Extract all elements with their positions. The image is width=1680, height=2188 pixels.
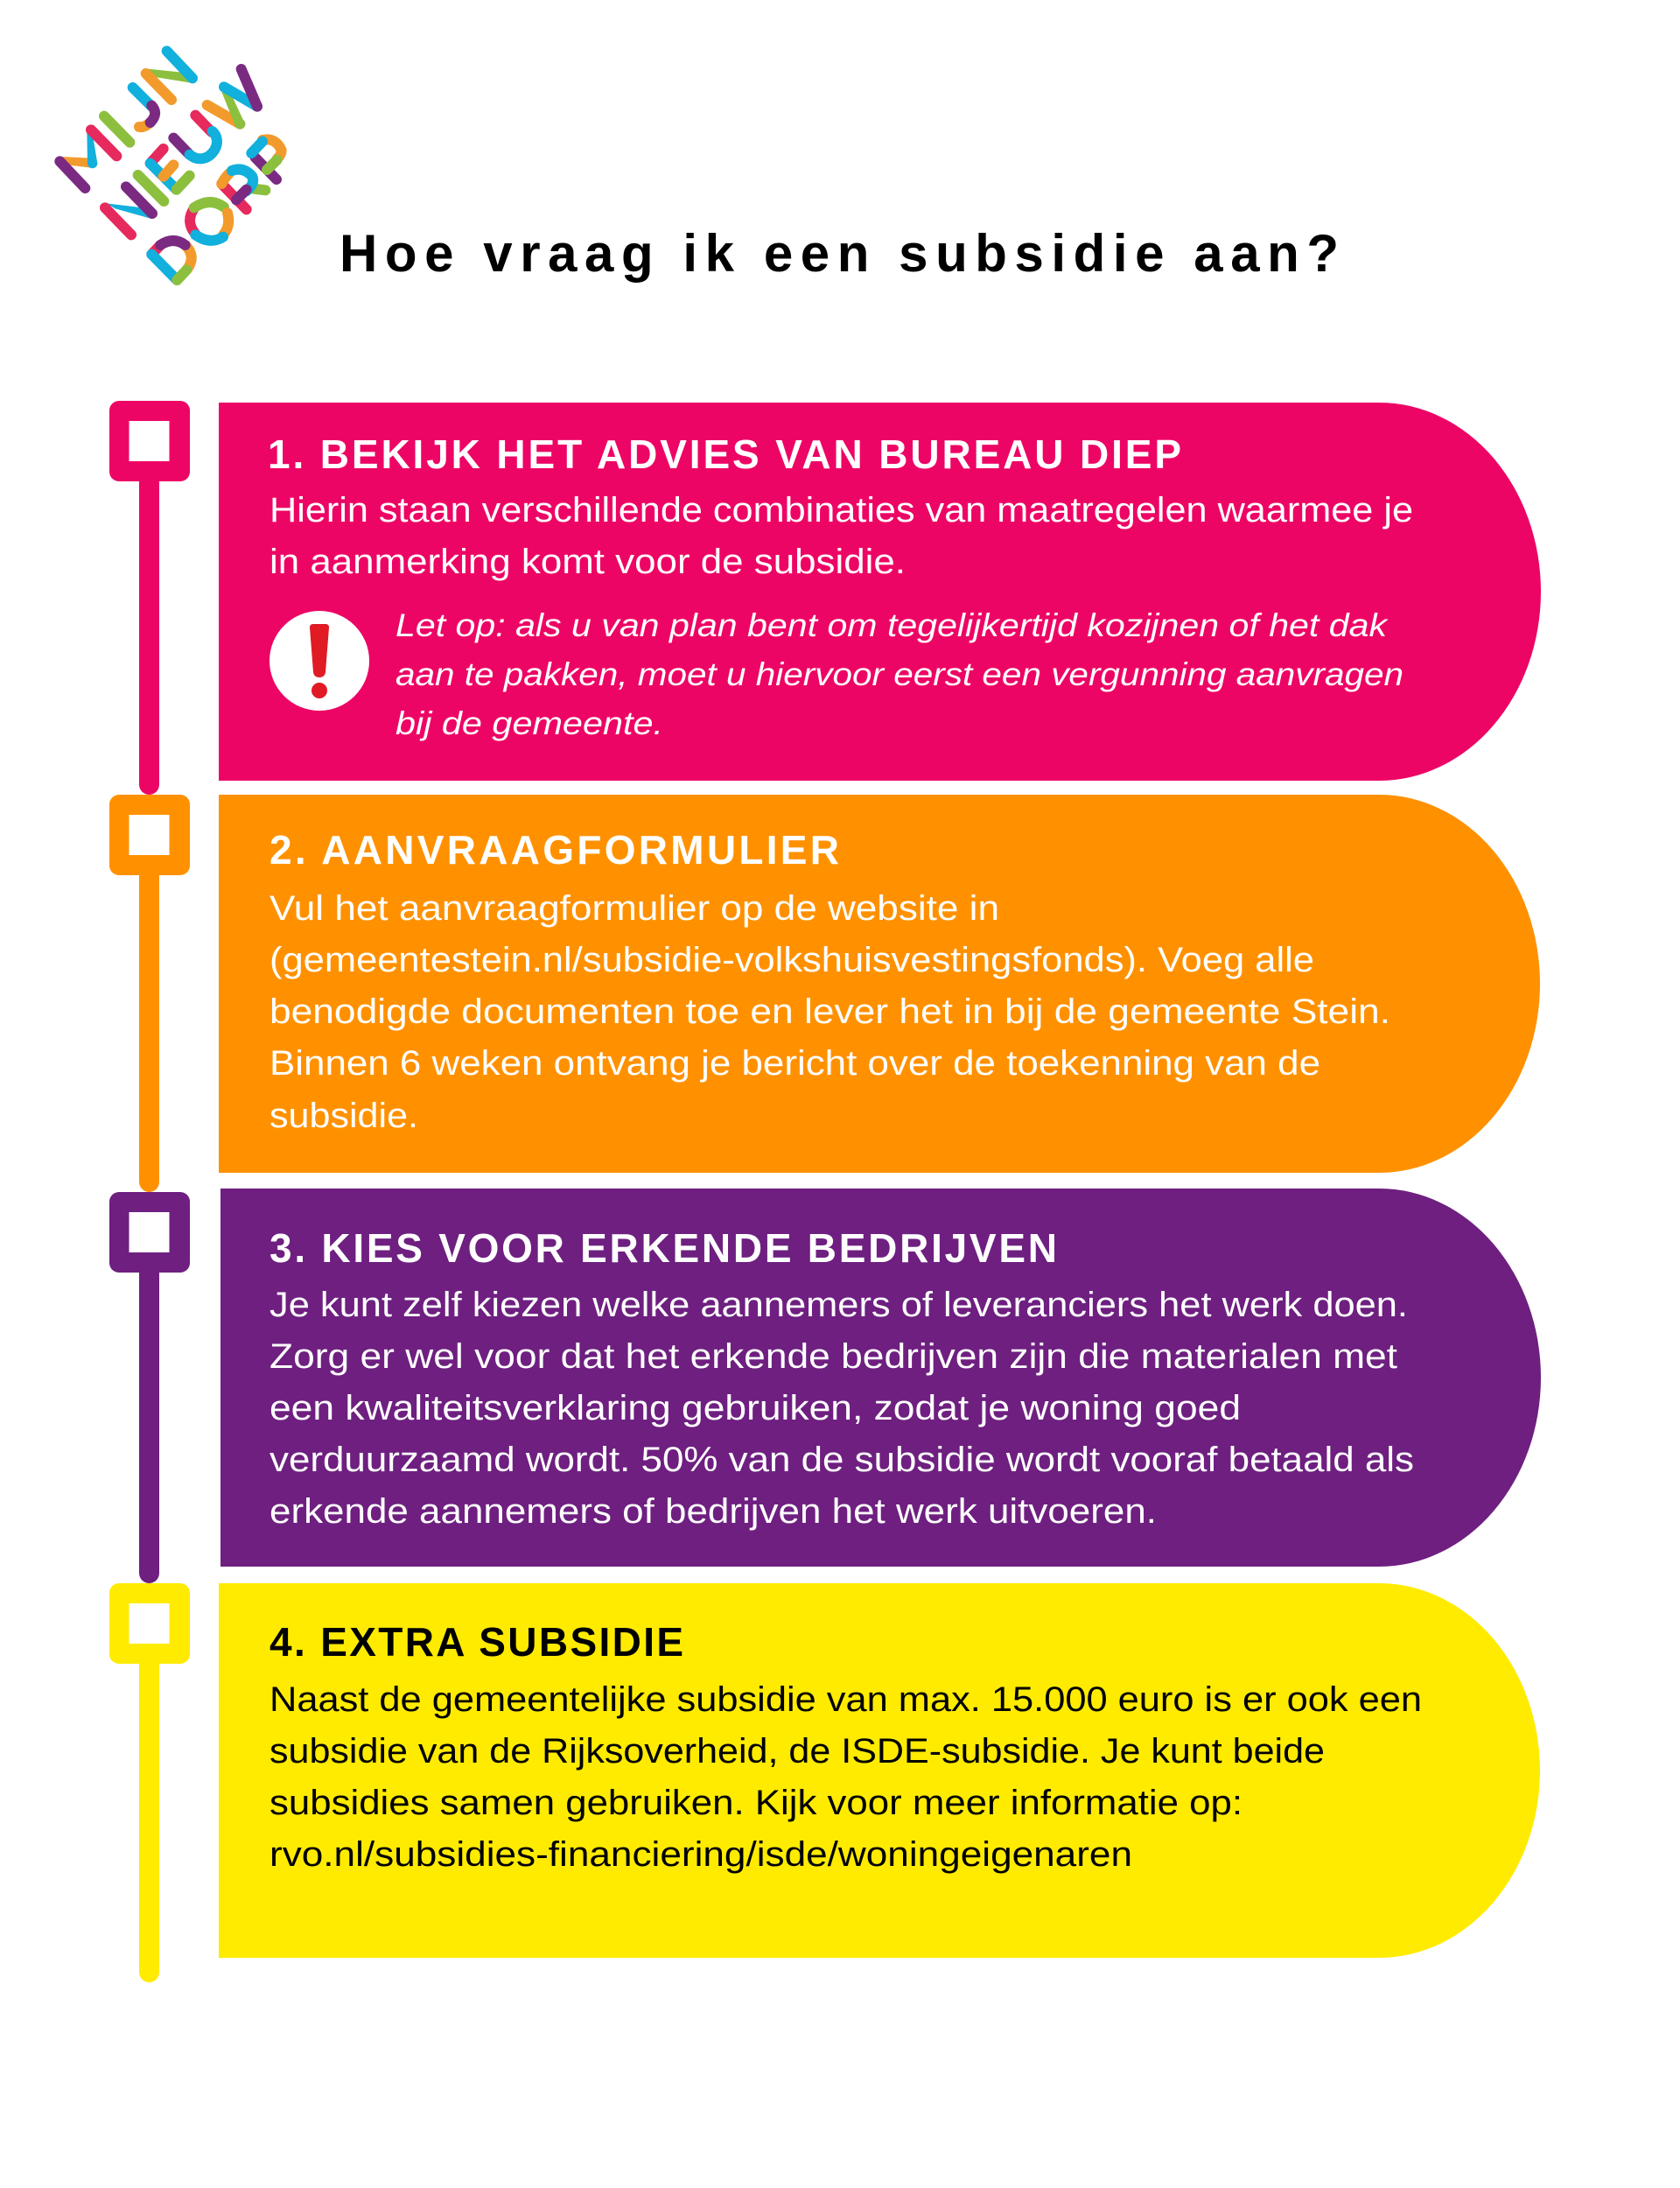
body text 4: rvo.nl/subsidies-financiering/isde/woningeigenaren	[270, 1835, 1132, 1874]
body text 3: verduurzaamd wordt. 50% van de subsidie wordt vooraf betaald als	[270, 1441, 1414, 1479]
timeline marker 4	[109, 1583, 190, 1982]
body text 3: erkende aannemers of bedrijven het werk uitvoeren.	[270, 1492, 1157, 1531]
body text 3: Zorg er wel voor dat het erkende bedrijven zijn die materialen met	[270, 1337, 1397, 1376]
panel 1: advies	[219, 403, 1541, 781]
body text 4	[270, 1680, 1422, 1874]
timeline marker 1	[109, 401, 190, 795]
body text 2: benodigde documenten toe en lever het in bij de gemeente Stein.	[270, 992, 1390, 1031]
body text 4: Naast de gemeentelijke subsidie van max. 15.000 euro is er ook een	[270, 1680, 1422, 1719]
warning note: Let op: als u van plan bent om tegelijkertijd kozijnen of het dak	[396, 607, 1390, 643]
heading 3: 3. KIES VOOR ERKENDE BEDRIJVEN	[270, 1225, 1057, 1271]
warning note: aan te pakken, moet u hiervoor eerst een vergunning aanvragen	[396, 656, 1404, 692]
body text 4: subsidies samen gebruiken. Kijk voor meer informatie op:	[270, 1784, 1242, 1822]
timeline marker 3	[109, 1192, 190, 1583]
body text 4: subsidie van de Rijksoverheid, de ISDE-subsidie. Je kunt beide	[270, 1732, 1325, 1771]
body text 3: een kwaliteitsverklaring gebruiken, zodat je woning goed	[270, 1389, 1241, 1427]
logo: Mijn Nieuw Dorp	[60, 51, 282, 280]
body text 3	[270, 1286, 1414, 1531]
body text 2: Vul het aanvraagformulier op de website in	[270, 889, 999, 928]
body text 2: subsidie.	[270, 1097, 418, 1135]
panel 3: erkende bedrijven	[220, 1189, 1541, 1567]
body text 1: Hierin staan verschillende combinaties van maatregelen waarmee je	[270, 491, 1413, 529]
body text 2: Binnen 6 weken ontvang je bericht over de toekenning van de	[270, 1044, 1320, 1083]
body text 1	[270, 491, 1413, 581]
body text 2	[270, 889, 1390, 1135]
panel 2: aanvraagformulier	[219, 795, 1540, 1173]
timeline marker 2	[109, 795, 190, 1192]
title: Hoe vraag ik een subsidie aan?	[340, 224, 1339, 283]
icon: exclamation mark	[270, 611, 369, 711]
heading 2: 2. AANVRAAGFORMULIER	[270, 827, 839, 873]
body text 1: in aanmerking komt voor de subsidie.	[270, 543, 906, 581]
warning note	[396, 607, 1404, 741]
warning note: bij de gemeente.	[396, 705, 663, 741]
heading 1: 1. BEKIJK HET ADVIES VAN BUREAU DIEP	[268, 431, 1181, 477]
panel 4: extra subsidie	[219, 1583, 1540, 1958]
body text 2: (gemeentestein.nl/subsidie-volkshuisvestingsfonds). Voeg alle	[270, 941, 1314, 979]
heading 4: 4. EXTRA SUBSIDIE	[270, 1619, 683, 1665]
body text 3: Je kunt zelf kiezen welke aannemers of leveranciers het werk doen.	[270, 1286, 1408, 1324]
